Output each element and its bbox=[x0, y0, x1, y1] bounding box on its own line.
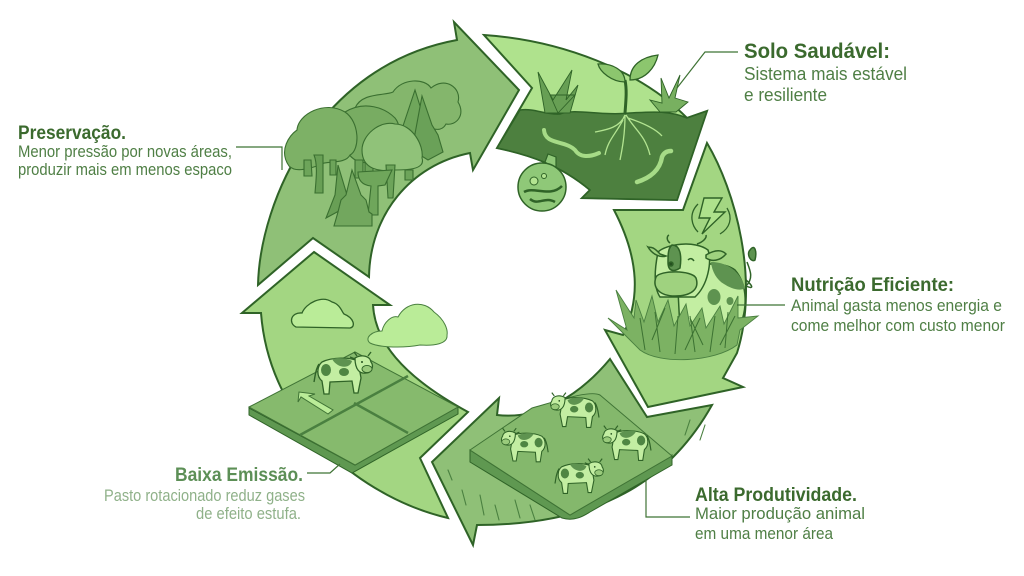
callout: preservacao bbox=[18, 123, 282, 179]
callout: baixa emissao bbox=[104, 464, 340, 523]
description bbox=[104, 486, 305, 523]
pasture top bbox=[470, 394, 672, 515]
icon: grass tuft bbox=[608, 290, 758, 360]
callout: alta produtividade bbox=[646, 480, 865, 543]
icon: grass tuft right bbox=[650, 75, 688, 112]
callout: solo saudavel bbox=[677, 40, 907, 105]
icon: cow eating bbox=[648, 235, 756, 330]
description: Animal gasta menos energia e bbox=[791, 296, 1002, 315]
arrow: low emission bbox=[242, 252, 468, 518]
icon: meadow grass bbox=[448, 420, 705, 520]
soil block bbox=[497, 110, 707, 200]
description: e resiliente bbox=[744, 85, 827, 105]
description: come melhor com custo menor bbox=[791, 316, 1005, 335]
icon: grass tuft left bbox=[538, 70, 578, 113]
icon: plant bbox=[595, 55, 662, 160]
icon: soil magnifier bubble bbox=[518, 154, 566, 211]
rotational paddocks bbox=[249, 352, 458, 473]
description: Menor pressão por novas áreas, bbox=[18, 142, 232, 161]
description: Maior produção animal bbox=[695, 504, 865, 523]
callout: nutricao eficiente bbox=[737, 275, 1005, 335]
icon: energy bolt bbox=[692, 198, 730, 234]
arrow: efficient nutrition bbox=[605, 143, 758, 407]
arrow: healthy soil bbox=[484, 35, 707, 211]
description: produzir mais em menos espaco bbox=[18, 160, 232, 179]
pasture block bbox=[470, 450, 672, 519]
icon: cow bottom bbox=[555, 459, 603, 493]
panel: cycle diagram bbox=[242, 22, 758, 545]
arrow: high productivity bbox=[432, 359, 712, 545]
icon: worm left bbox=[544, 130, 599, 156]
description: de efeito estufa. bbox=[196, 504, 301, 523]
heading: Alta Produtividade. bbox=[695, 485, 857, 506]
heading: Nutrição Eficiente: bbox=[791, 275, 954, 296]
icon: cow right bbox=[603, 426, 651, 460]
icon: cloud left bbox=[291, 299, 353, 328]
description: Sistema mais estável bbox=[744, 64, 907, 84]
icon: cow on paddock bbox=[314, 352, 372, 394]
icon: worm right bbox=[637, 151, 671, 182]
description: Pasto rotacionado reduz gases bbox=[104, 486, 305, 505]
heading: Solo Saudável: bbox=[744, 40, 890, 63]
description bbox=[18, 142, 232, 179]
icon: cow top bbox=[551, 393, 599, 427]
heading: Preservação. bbox=[18, 123, 126, 144]
icon: forest bbox=[285, 81, 461, 226]
description: em uma menor área bbox=[695, 524, 833, 543]
heading: Baixa Emissão. bbox=[175, 465, 303, 486]
icon: cloud right bbox=[368, 304, 447, 347]
arrow: preservation forest bbox=[258, 22, 519, 285]
description bbox=[791, 296, 1005, 335]
description bbox=[744, 64, 907, 105]
icon: cow left bbox=[501, 428, 548, 462]
description bbox=[695, 504, 865, 543]
